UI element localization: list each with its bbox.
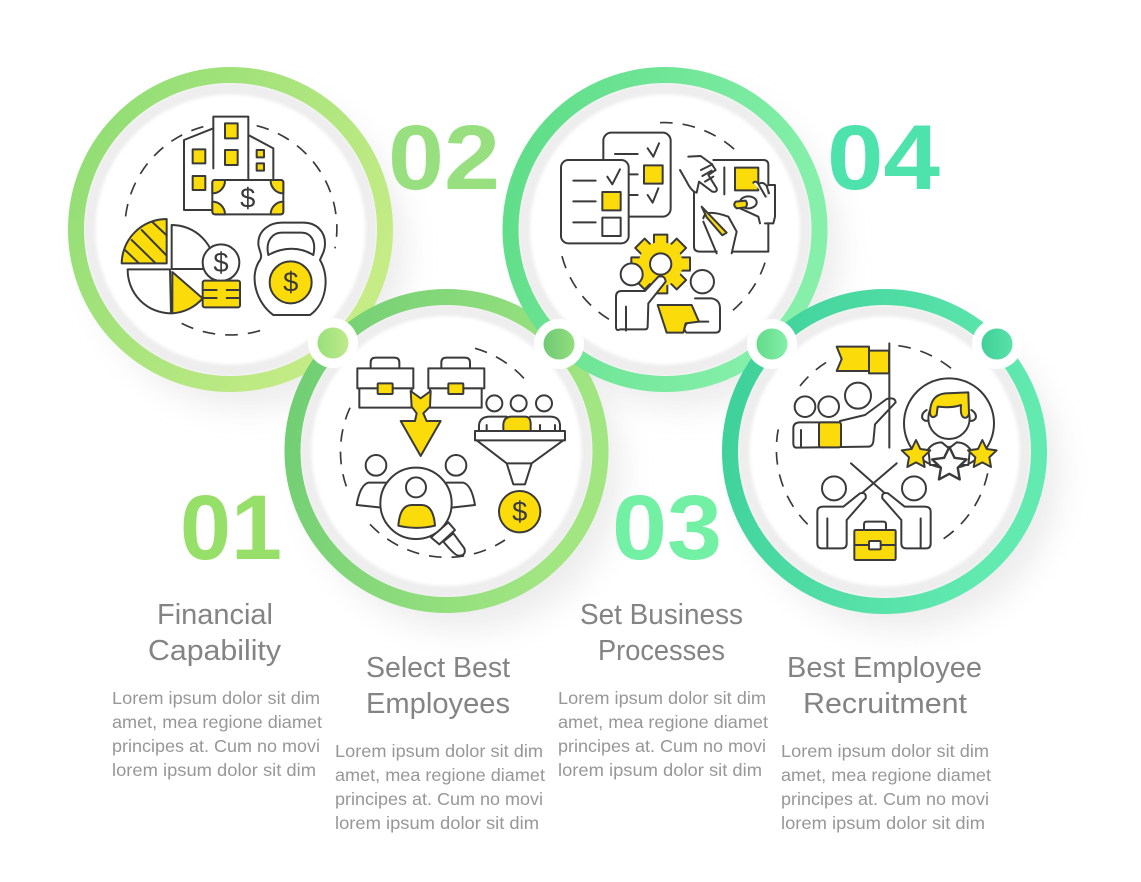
icon: building, cash, pie chart, coins and kettlebell: $ — [283, 267, 298, 298]
body 3: Lorem ipsum dolor sit dim — [558, 688, 766, 708]
body 1: principes at. Cum no movi — [112, 736, 320, 756]
panel 3: set business processes circle — [510, 75, 820, 384]
text block 4: best employee recruitment — [781, 652, 991, 833]
heading 2: Select Best — [366, 652, 510, 684]
ring 4 — [730, 297, 1039, 606]
body 3: lorem ipsum dolor sit dim — [558, 760, 762, 780]
body 3: principes at. Cum no movi — [558, 736, 766, 756]
connector dot 1 — [308, 318, 358, 368]
ring 2 — [292, 297, 600, 605]
body 3 — [558, 688, 768, 780]
number 04: 04 — [827, 107, 940, 209]
ring 3 — [510, 75, 820, 384]
heading 2 — [366, 652, 510, 720]
heading 1: Capability — [148, 635, 282, 667]
heading 1 — [148, 599, 282, 667]
body 3: amet, mea regione diamet — [558, 712, 768, 732]
connector dot 4 — [972, 319, 1022, 369]
icon: building, cash, pie chart, coins and kettlebell: $ — [240, 182, 255, 213]
icon: checklists, hands on board and team with gear — [561, 123, 775, 333]
body 1: amet, mea regione diamet — [112, 712, 322, 732]
ring 1 — [76, 75, 385, 384]
icon: briefcases, funnel, candidates and magnifier — [340, 348, 565, 557]
text block 1: financial capability — [112, 599, 322, 780]
heading 3: Set Business — [580, 599, 743, 631]
number 01: 01 — [180, 477, 282, 579]
connector dot 3 — [747, 319, 797, 369]
body 4: principes at. Cum no movi — [781, 789, 989, 809]
panel 2: select best employees circle — [292, 297, 600, 605]
body 1 — [112, 688, 322, 780]
connector dot 2 — [534, 319, 584, 369]
text block 3: set business processes — [558, 599, 768, 780]
icon: building, cash, pie chart, coins and kettlebell — [122, 117, 337, 335]
body 1: Lorem ipsum dolor sit dim — [112, 688, 320, 708]
heading 4 — [787, 652, 982, 720]
body 4: lorem ipsum dolor sit dim — [781, 813, 985, 833]
text block 2: select best employees — [335, 652, 545, 833]
body 2: principes at. Cum no movi — [335, 789, 543, 809]
panel 1: financial capability circle — [76, 75, 385, 384]
heading 1: Financial — [157, 599, 273, 631]
body 2 — [335, 741, 545, 833]
number 03: 03 — [612, 477, 722, 579]
heading 2: Employees — [366, 688, 510, 720]
heading 4: Best Employee — [787, 652, 982, 684]
icon: briefcases, funnel, candidates and magnifier: $ — [512, 496, 527, 527]
icon: team with flag, star employee and handshake with briefcase — [776, 343, 997, 560]
heading 3 — [580, 599, 743, 667]
number 02: 02 — [388, 107, 500, 209]
heading 4: Recruitment — [803, 688, 967, 720]
heading 3: Processes — [598, 635, 725, 667]
body 4: Lorem ipsum dolor sit dim — [781, 741, 989, 761]
body 4 — [781, 741, 991, 833]
icon: building, cash, pie chart, coins and kettlebell: $ — [213, 247, 229, 278]
body 2: lorem ipsum dolor sit dim — [335, 813, 539, 833]
body 4: amet, mea regione diamet — [781, 765, 991, 785]
body 1: lorem ipsum dolor sit dim — [112, 760, 316, 780]
body 2: Lorem ipsum dolor sit dim — [335, 741, 543, 761]
panel 4: best employee recruitment circle — [730, 297, 1039, 606]
body 2: amet, mea regione diamet — [335, 765, 545, 785]
circle shadows — [90, 92, 1060, 630]
white discs with grey inner rings — [76, 74, 1040, 606]
